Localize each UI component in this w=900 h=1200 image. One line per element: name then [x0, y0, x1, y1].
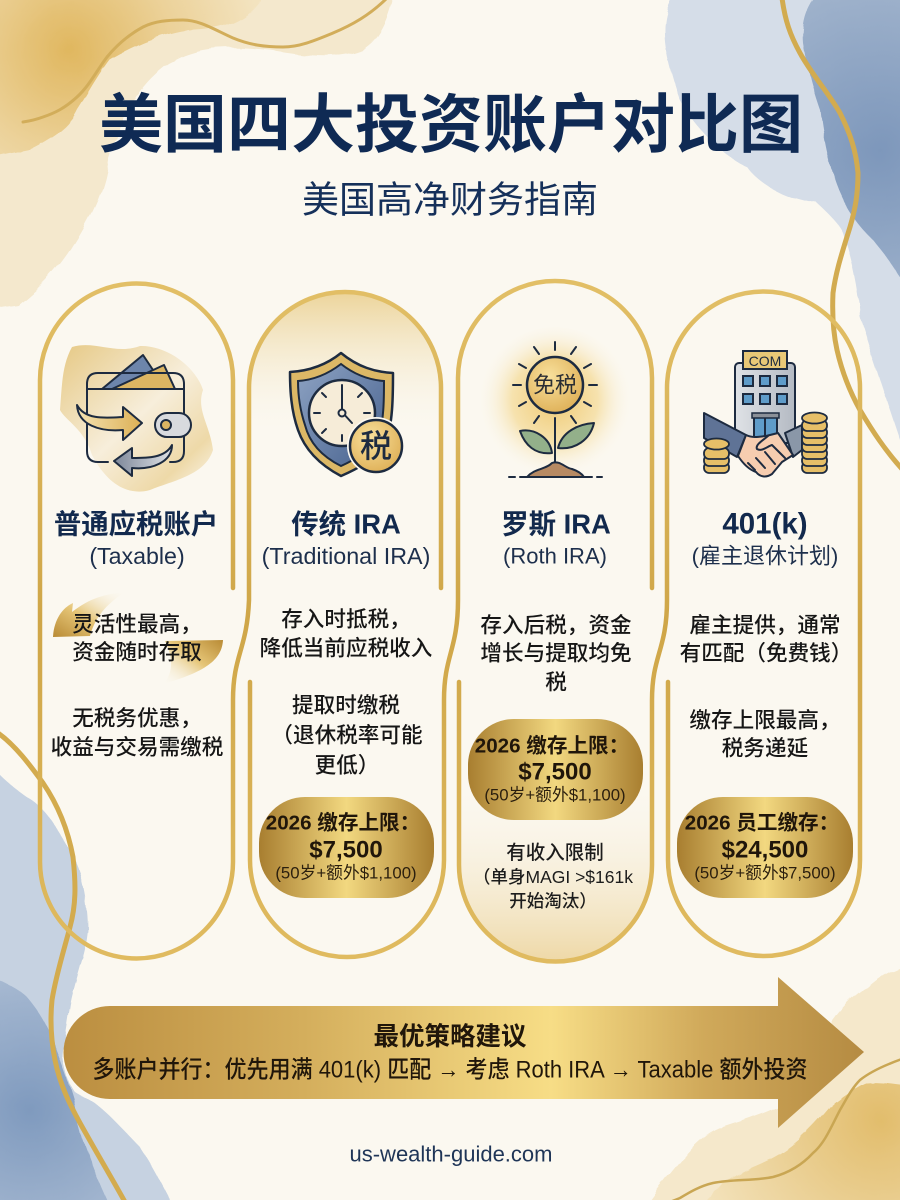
icon: shield clock with tax badge — [290, 353, 405, 476]
heading: taxable: 普通应税账户 — [54, 508, 218, 540]
text: highest limit — [689, 708, 841, 760]
panel: traditional IRA — [250, 292, 442, 958]
arrow: optimal strategy: 最优策略建议 — [373, 1023, 527, 1051]
callout: 2026 limit: (50岁+额外$1,100) — [484, 786, 626, 804]
text: taxed on withdrawal: 更低） — [315, 752, 379, 778]
subheading: traditional IRA: (Traditional IRA) — [262, 543, 430, 569]
text: after-tax: 增长与提取均免 — [480, 640, 632, 666]
text: income limit — [473, 842, 633, 911]
callout: 2026 limit: $7,500 — [518, 758, 592, 786]
text: deduction — [260, 606, 432, 660]
callout: 2026 limit: 2026 缴存上限： — [475, 734, 629, 758]
text: flexibility: 灵活性最高， — [72, 612, 202, 636]
panel: taxable account — [40, 283, 233, 960]
text: employer match — [680, 612, 852, 666]
text: no tax benefit — [51, 706, 223, 760]
callout: 2026 limit — [259, 797, 434, 898]
text: after-tax — [480, 612, 632, 694]
subtitle: 美国高净财务指南 — [302, 180, 598, 220]
callout: 2026 limit: $7,500 — [309, 836, 383, 864]
arrow: optimal strategy — [63, 977, 864, 1128]
text: no tax benefit: 无税务优惠， — [72, 706, 202, 730]
text: taxed on withdrawal: 提取时缴税 — [292, 692, 400, 718]
icon: wallet with arrows — [60, 345, 213, 492]
text: flexibility: 资金随时存取 — [72, 640, 202, 664]
callout: 2026 limit: (50岁+额外$1,100) — [275, 864, 417, 882]
text: highest limit: 缴存上限最高， — [689, 708, 841, 732]
text: after-tax: 税 — [545, 670, 567, 694]
panel: Roth IRA — [459, 281, 652, 962]
callout: 2026 employee contribution: (50岁+额外$7,500) — [694, 864, 836, 882]
heading: Roth IRA: 罗斯 IRA — [501, 508, 611, 540]
text: taxed on withdrawal — [271, 692, 423, 778]
callout: 2026 limit: 2026 缴存上限： — [266, 812, 420, 834]
text: highest limit: 税务递延 — [722, 736, 808, 760]
gold ribbon panel outlines — [40, 281, 860, 962]
text: taxed on withdrawal: （退休税率可能 — [271, 722, 423, 748]
icon: building handshake coins: COM — [749, 353, 781, 369]
text: income limit: （单身MAGI >$161k — [473, 867, 633, 887]
text: employer match: 有匹配（免费钱） — [680, 640, 852, 666]
heading: traditional IRA: 传统 IRA — [291, 508, 401, 540]
heading: 401(k): 401(k) — [722, 508, 808, 540]
subheading: taxable: (Taxable) — [89, 543, 185, 569]
text: income limit: 有收入限制 — [506, 842, 604, 864]
icon: building handshake coins — [704, 351, 827, 476]
callout: 2026 employee contribution: $24,500 — [722, 836, 808, 864]
text: no tax benefit: 收益与交易需缴税 — [51, 734, 223, 760]
text: deduction: 降低当前应税收入 — [260, 636, 432, 660]
callout: 2026 employee contribution — [677, 797, 853, 898]
text: deduction: 存入时抵税， — [281, 606, 411, 632]
gold swoosh accents — [53, 592, 223, 684]
icon: sun and sprout — [477, 327, 633, 483]
arrow: optimal strategy: 多账户并行：优先用满 401(k) 匹配 → 考虑 Roth IRA → Taxable 额外投资 — [92, 1056, 808, 1084]
callout: 2026 limit — [468, 719, 643, 820]
panel tints — [250, 281, 652, 962]
icon: sun and sprout: 免税 — [533, 372, 577, 398]
callout: 2026 employee contribution: 2026 员工缴存： — [685, 812, 839, 834]
panel: 401(k) — [667, 291, 860, 958]
text: employer match: 雇主提供，通常 — [689, 612, 841, 638]
footer url: us-wealth-guide.com — [350, 1142, 552, 1166]
subheading: Roth IRA: (Roth IRA) — [503, 544, 607, 568]
text: flexibility — [72, 612, 202, 664]
text: after-tax: 存入后税，资金 — [480, 612, 632, 638]
title: 美国四大投资账户对比图 — [99, 89, 803, 161]
text: income limit: 开始淘汰） — [509, 891, 597, 911]
icon: shield clock with tax badge: 税 — [360, 428, 392, 464]
subheading: employer plan: (雇主退休计划) — [692, 544, 838, 568]
